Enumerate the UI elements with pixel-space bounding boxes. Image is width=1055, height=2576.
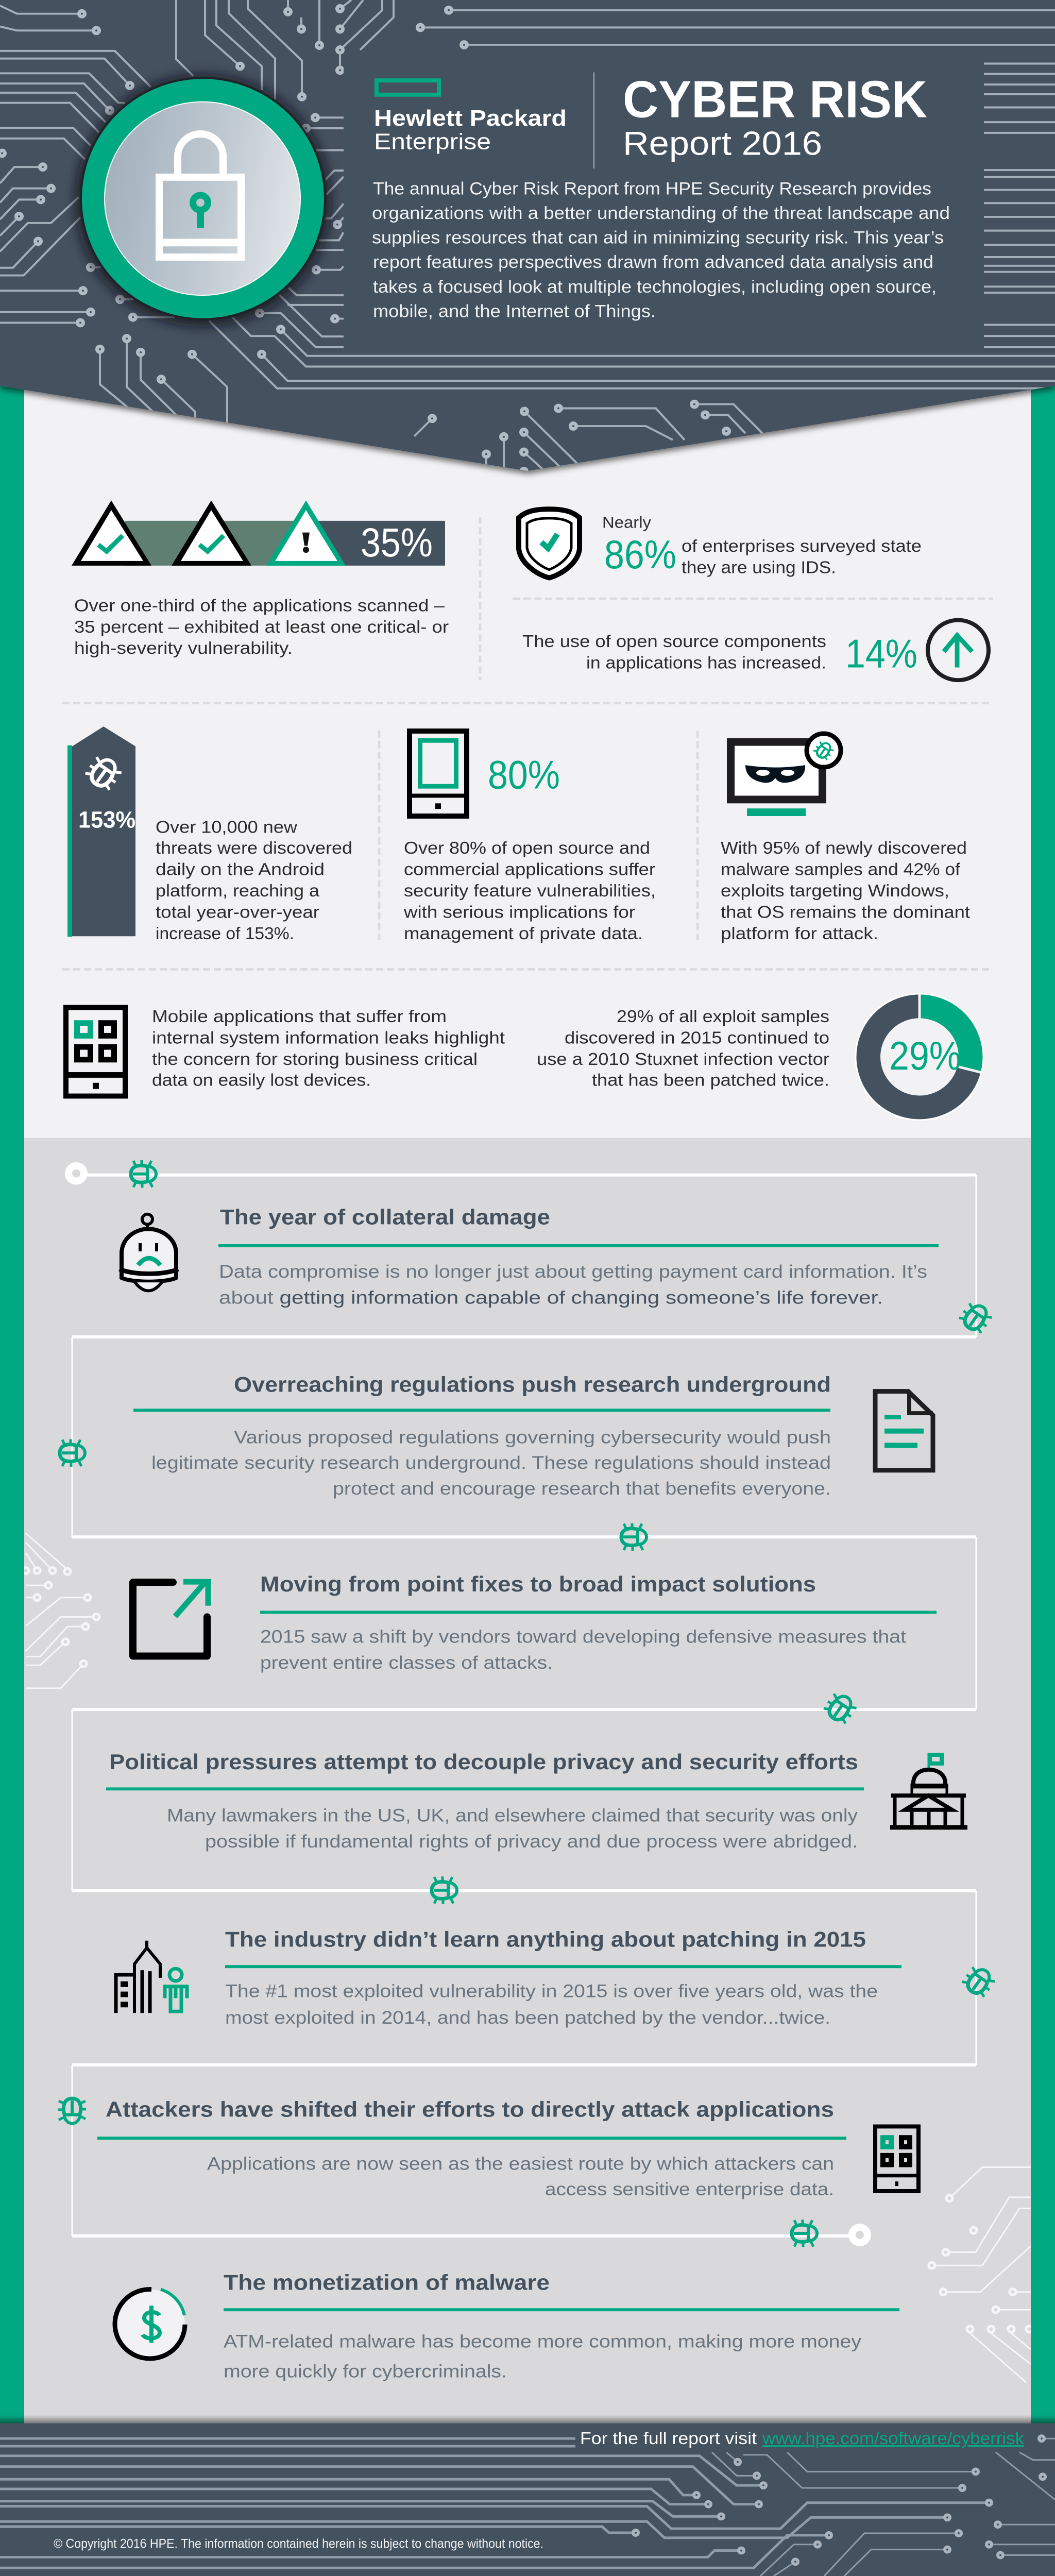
Windows description: exploits targeting Windows, — [721, 881, 949, 901]
finding 1 body: about getting information capable of changing someone’s life forever. — [219, 1287, 883, 1308]
finding 2 body: Various proposed regulations governing cybersecurity would push — [234, 1427, 831, 1447]
86% description: they are using IDS. — [682, 558, 836, 578]
stat: 80 percent applications — [403, 731, 656, 943]
icon: shield — [519, 509, 580, 578]
serpentine connector path — [69, 1166, 976, 2243]
Stuxnet description: use a 2010 Stuxnet infection vector — [537, 1049, 829, 1069]
icon: triangle warning — [266, 500, 346, 566]
copyright: © Copyright 2016 HPE. The information contained herein is subject to change without notice. — [54, 2537, 543, 2551]
intro paragraph — [372, 179, 950, 321]
icon: mobile app grid — [63, 1008, 128, 1096]
Windows description: With 95% of newly discovered — [721, 838, 967, 858]
right green side bar — [1031, 382, 1055, 2426]
icon: triangle check 2 — [172, 500, 251, 566]
intro paragraph: The annual Cyber Risk Report from HPE Security Research provides — [373, 179, 931, 198]
icon: arrow tag — [67, 726, 135, 937]
logo wordmark line 1: Hewlett Packard — [374, 106, 567, 131]
Windows description: platform for attack. — [721, 924, 878, 943]
title: CYBER RISK — [623, 71, 927, 128]
stat: mobile leaks — [63, 1007, 505, 1096]
86% description: of enterprises surveyed state — [682, 536, 922, 556]
icon: document — [875, 1392, 933, 1470]
Android description: increase of 153%. — [156, 924, 294, 943]
bar right part — [295, 521, 445, 566]
finding 2 heading: Overreaching regulations push research underground — [234, 1372, 831, 1397]
footer — [0, 2424, 1055, 2576]
path end node — [852, 2227, 867, 2243]
full report link line — [580, 2429, 1024, 2448]
title: Report 2016 — [623, 125, 822, 162]
open source description: in applications has increased. — [586, 653, 826, 672]
Stuxnet description: that has been patched twice. — [592, 1071, 829, 1090]
14% value: 14% — [845, 631, 917, 676]
80% description: management of private data. — [404, 924, 643, 943]
logo element rectangle — [377, 80, 439, 95]
finding 3 body: prevent entire classes of attacks. — [260, 1652, 553, 1673]
full report link line: For the full report visit — [580, 2429, 757, 2448]
finding 1: collateral damage — [120, 1205, 939, 1308]
80% description: commercial applications suffer — [404, 860, 655, 879]
finding 6 body: access sensitive enterprise data. — [545, 2179, 834, 2199]
left circuit decoration — [23, 1533, 99, 1688]
finding 1 rule — [218, 1244, 939, 1247]
header divider — [593, 72, 594, 168]
finding 7 body: more quickly for cybercriminals. — [224, 2361, 507, 2382]
Android description: threats were discovered — [156, 838, 352, 858]
finding 4 body: Many lawmakers in the US, UK, and elsewhere claimed that security was only — [167, 1805, 858, 1826]
Windows description: malware samples and 42% of — [721, 860, 961, 879]
finding 2 body: legitimate security research underground. These regulations should instead — [151, 1452, 831, 1473]
logo wordmark line 2: Enterprise — [374, 129, 491, 154]
Android description: Over 10,000 new — [156, 818, 298, 837]
title — [623, 71, 927, 162]
icon: capitol building — [890, 1753, 967, 1829]
mobile description: Mobile applications that suffer from — [152, 1007, 447, 1026]
icon: triangle check 1 — [72, 500, 151, 566]
35% description: high-severity vulnerability. — [74, 638, 293, 658]
finding 5 body: most exploited in 2014, and has been patched by the vendor...twice. — [225, 2007, 830, 2028]
stat: 86 percent IDS — [519, 509, 922, 578]
finding 3 body — [260, 1626, 906, 1673]
finding 4 body — [167, 1805, 858, 1852]
footer shadow — [0, 2415, 1055, 2424]
Android description: daily on the Android — [156, 860, 325, 879]
intro paragraph: mobile, and the Internet of Things. — [373, 302, 656, 321]
intro paragraph: report features perspectives drawn from advanced data analysis and — [373, 252, 933, 272]
full report link line: www.hpe.com/software/cyberrisk — [762, 2429, 1024, 2448]
finding 5 heading: The industry didn’t learn anything about patching in 2015 — [225, 1927, 866, 1952]
grey findings section — [24, 1138, 1031, 2424]
Android description — [156, 818, 352, 943]
finding 7 rule — [224, 2308, 899, 2311]
finding 5 body: The #1 most exploited vulnerability in 2015 is over five years old, was the — [225, 1981, 878, 2001]
finding 6 rule — [97, 2137, 846, 2140]
finding 6: attack applications — [97, 2097, 921, 2199]
Windows description — [721, 838, 971, 943]
bug markers on path — [58, 1160, 997, 2247]
finding 3 rule — [260, 1611, 937, 1614]
left green side bar — [0, 382, 24, 2426]
finding 4: political pressures — [106, 1750, 967, 1852]
80% value: 80% — [488, 752, 560, 798]
header banner — [0, 0, 1055, 474]
mobile description — [152, 1007, 505, 1090]
HPE logo — [374, 80, 567, 154]
35% description: Over one-third of the applications scanned – — [74, 596, 445, 616]
icon: sad bell — [120, 1214, 178, 1291]
Stuxnet description: 29% of all exploit samples — [617, 1007, 829, 1026]
Nearly label: Nearly — [602, 513, 651, 532]
finding 1 body: Data compromise is no longer just about getting payment card information. It’s — [219, 1261, 927, 1282]
mobile description: data on easily lost devices. — [152, 1071, 371, 1090]
icon: small app grid — [873, 2126, 921, 2191]
finding 2: regulations — [133, 1372, 933, 1499]
stat: 14 percent open source — [522, 620, 989, 680]
finding 2 rule — [133, 1409, 830, 1412]
icon: up arrow circle — [928, 620, 989, 680]
donut chart: 29% — [889, 1033, 961, 1078]
finding 4 body: possible if fundamental rights of privacy and due process were abridged. — [205, 1831, 858, 1852]
open source description — [522, 632, 826, 672]
finding 5 body — [225, 1981, 878, 2028]
intro paragraph: takes a focused look at multiple technologies, including open source, — [373, 277, 937, 297]
icon: city and person — [116, 1941, 187, 2013]
finding 1 body — [219, 1261, 927, 1308]
mobile description: internal system information leaks highlight — [152, 1028, 505, 1048]
intro paragraph: organizations with a better understanding of the threat landscape and — [372, 204, 950, 223]
donut chart — [856, 993, 984, 1120]
86% value: 86% — [604, 532, 676, 577]
Android description: platform, reaching a — [156, 881, 319, 901]
bar left part — [125, 521, 295, 566]
Stuxnet description — [537, 1007, 829, 1090]
80% description: with serious implications for — [403, 903, 635, 922]
stat: 35 percent — [72, 500, 449, 658]
finding 7 heading: The monetization of malware — [224, 2270, 550, 2295]
stat: 29 percent Stuxnet — [537, 993, 984, 1120]
right circuit decoration — [929, 2167, 1032, 2383]
Android description: total year-over-year — [156, 903, 319, 922]
finding 6 heading: Attackers have shifted their efforts to directly attack applications — [106, 2097, 834, 2122]
intro paragraph: supplies resources that can aid in minimizing security risk. This year’s — [372, 228, 944, 247]
path start node — [69, 1166, 84, 1181]
stat: Windows malware — [721, 734, 971, 943]
icon: masked monitor — [730, 734, 841, 816]
finding 7 body — [224, 2331, 861, 2382]
80% description — [403, 838, 656, 943]
icon: arrow tag: 153% — [78, 807, 135, 833]
finding 5: patching — [116, 1927, 901, 2028]
dashed dividers — [62, 517, 993, 969]
finding 5 rule — [225, 1965, 901, 1968]
35% description: 35 percent – exhibited at least one critical- or — [74, 617, 449, 637]
Stuxnet description: discovered in 2015 continued to — [565, 1028, 829, 1048]
finding 3 body: 2015 saw a shift by vendors toward developing defensive measures that — [260, 1626, 906, 1647]
finding 3 heading: Moving from point fixes to broad impact solutions — [260, 1572, 816, 1596]
finding 6 body — [207, 2154, 834, 2199]
Windows description: that OS remains the dominant — [721, 903, 971, 922]
80% description: security feature vulnerabilities, — [404, 881, 656, 901]
finding 4 heading: Political pressures attempt to decouple privacy and security efforts — [109, 1750, 858, 1774]
icon: expand arrow — [133, 1582, 208, 1656]
icon: dollar ring — [115, 2290, 185, 2359]
35% description — [74, 596, 449, 658]
header text panel — [344, 63, 984, 348]
35% value: 35% — [361, 519, 433, 565]
finding 1 heading: The year of collateral damage — [220, 1205, 550, 1229]
open source description: The use of open source components — [522, 632, 826, 651]
stat: 153 percent Android — [67, 726, 352, 943]
icon: tablet — [407, 731, 469, 816]
finding 4 rule — [106, 1787, 864, 1790]
finding 2 body: protect and encourage research that benefits everyone. — [333, 1478, 831, 1499]
icon: padlock badge — [75, 74, 331, 327]
finding 7: monetization — [115, 2270, 899, 2382]
mobile description: the concern for storing business critical — [152, 1049, 478, 1069]
finding 7 body: ATM-related malware has become more common, making more money — [224, 2331, 861, 2351]
header circuit pattern — [0, 0, 1055, 474]
finding 2 body — [151, 1427, 831, 1499]
finding 3: broad impact — [133, 1572, 937, 1673]
right edge line strip — [984, 64, 1055, 347]
86% description — [682, 536, 922, 578]
80% description: Over 80% of open source and — [404, 838, 650, 858]
footer circuit pattern — [0, 2436, 1055, 2576]
finding 6 body: Applications are now seen as the easiest route by which attackers can — [207, 2154, 834, 2174]
